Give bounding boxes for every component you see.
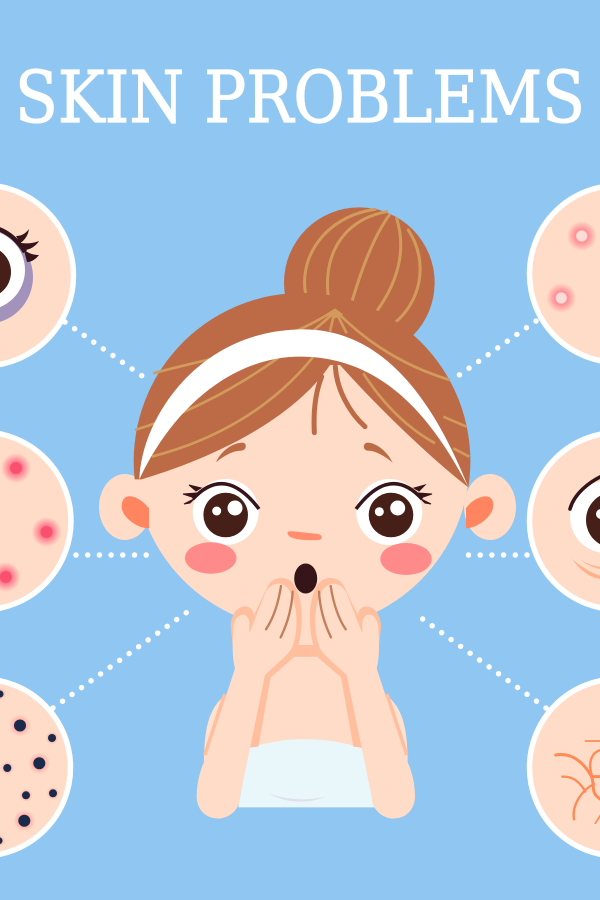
right hand and arm bbox=[305, 578, 415, 819]
hands bbox=[197, 578, 415, 819]
eyebrows bbox=[216, 443, 393, 463]
circle: pimples bbox=[0, 432, 71, 610]
left hand and arm bbox=[197, 578, 307, 819]
character: body, towel and chest bbox=[204, 590, 408, 807]
circle: wrinkles around eye bbox=[530, 432, 600, 610]
inner ears bbox=[122, 496, 493, 528]
right eye bbox=[356, 479, 432, 545]
hair and headband bbox=[134, 293, 470, 487]
nose bbox=[287, 531, 322, 540]
circle: broken capillaries bbox=[530, 679, 600, 856]
chest bbox=[250, 657, 360, 748]
left eye bbox=[183, 479, 259, 545]
circle: dark circles under eye bbox=[0, 185, 74, 366]
ears bbox=[99, 474, 516, 540]
dotted connectors bbox=[53, 321, 546, 708]
fringe strands bbox=[314, 367, 365, 433]
hair strands bbox=[135, 310, 469, 457]
mouth bbox=[294, 564, 317, 594]
circle: blackheads bbox=[0, 679, 70, 856]
hair bbox=[134, 293, 470, 487]
neck bbox=[292, 590, 321, 657]
hair bun bbox=[284, 207, 435, 358]
towel bbox=[238, 739, 374, 807]
face bbox=[134, 294, 470, 630]
cheeks bbox=[185, 542, 432, 575]
circle: whiteheads bbox=[530, 186, 600, 362]
headband bbox=[139, 329, 468, 487]
shoulders bbox=[204, 694, 408, 763]
